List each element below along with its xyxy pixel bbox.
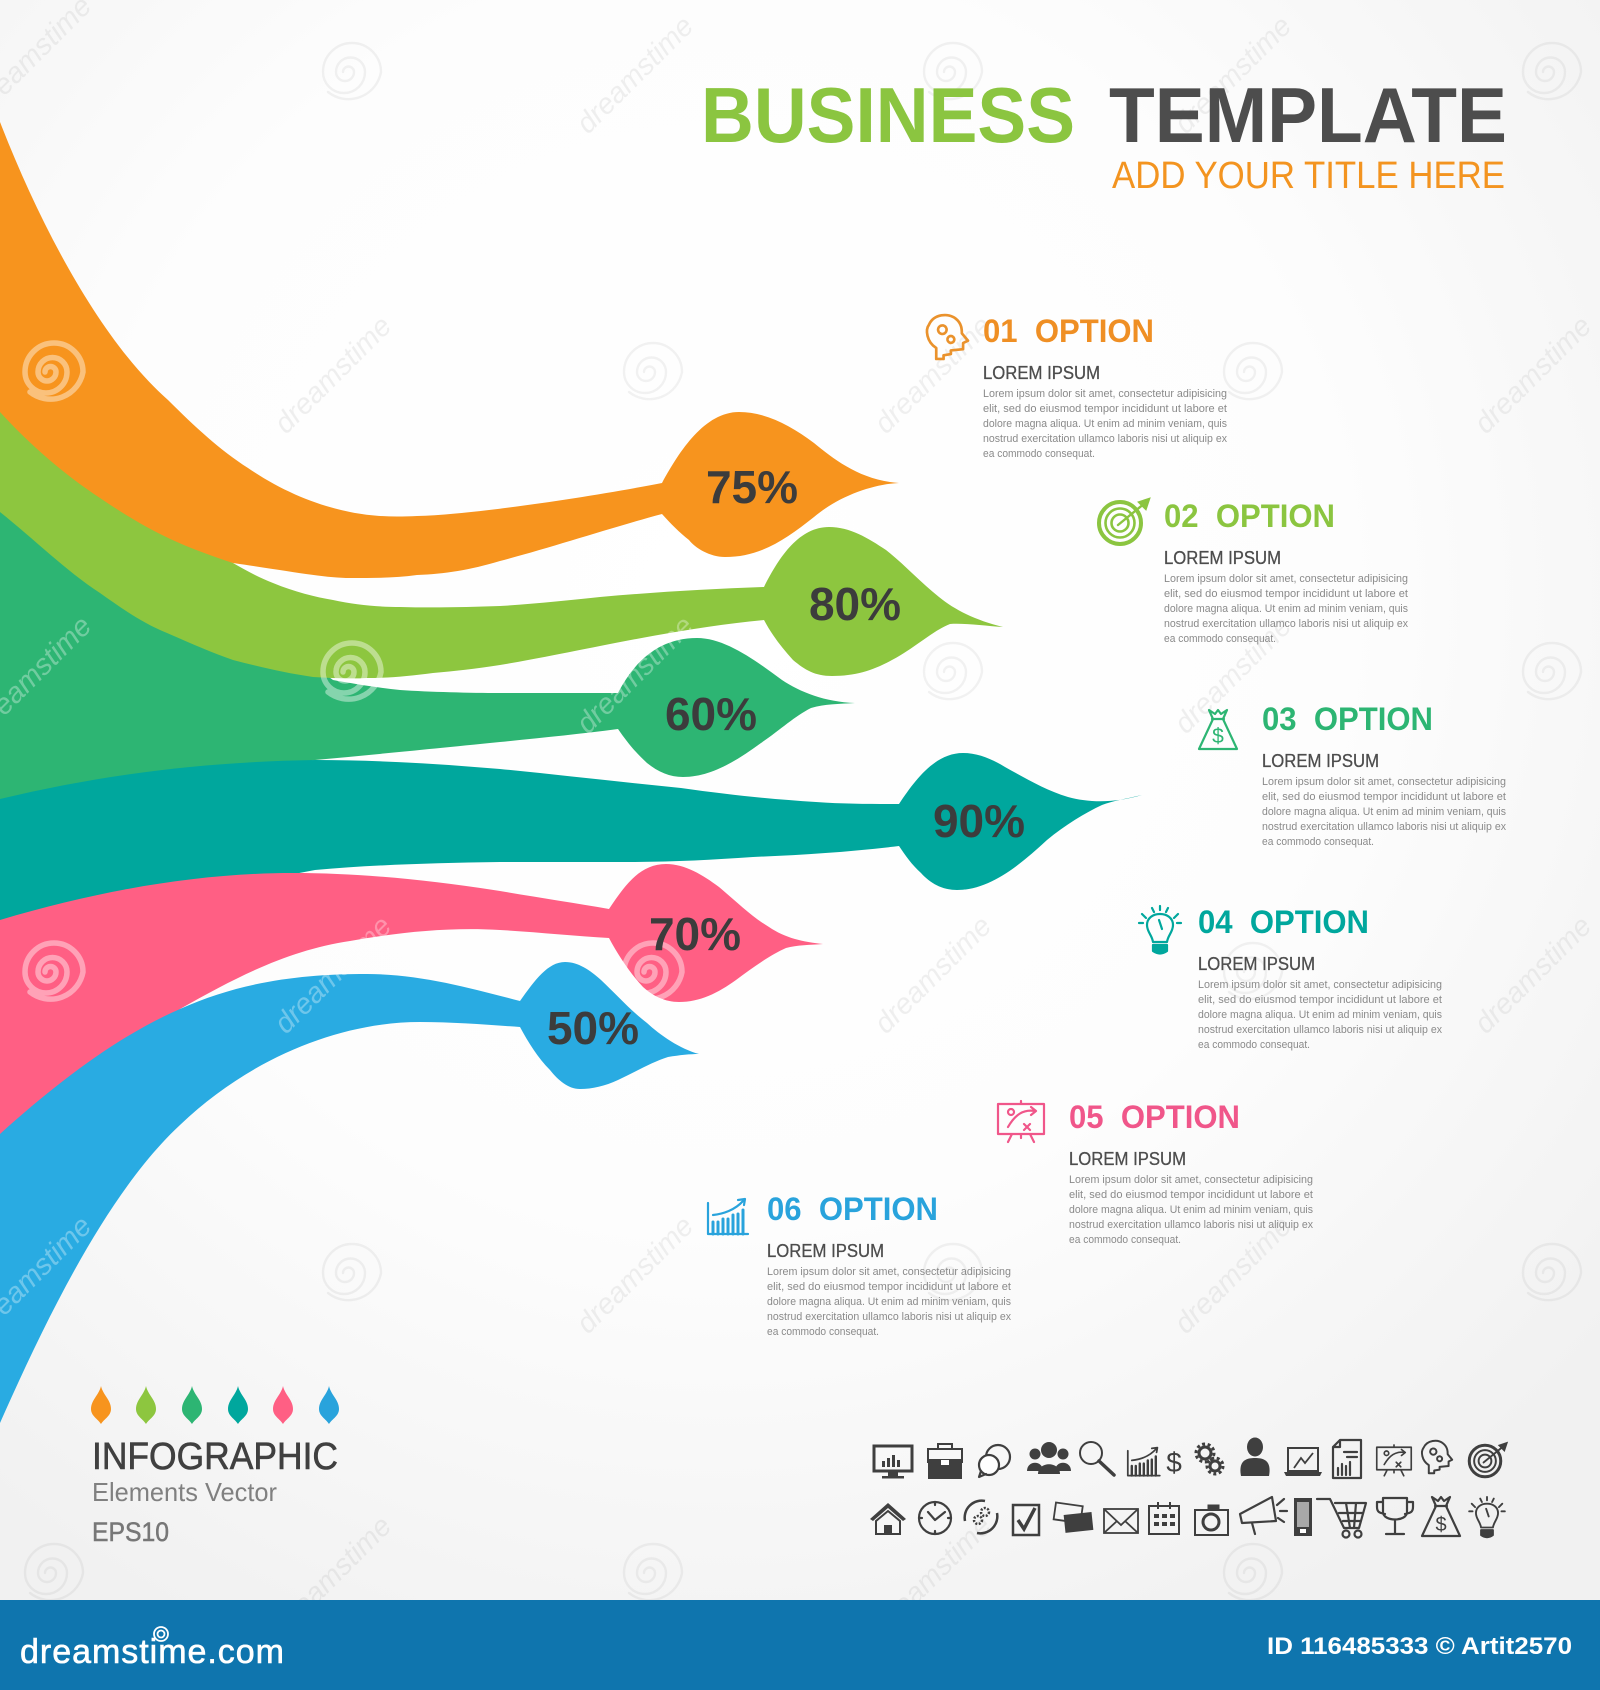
icon: document [1333,1440,1361,1478]
body text: dolore magna aliqua. Ut enim ad minim veniam, quis [1262,806,1506,818]
legend: colour drops [91,1386,339,1424]
icon: head with gears [927,315,968,359]
icon: credit cards [1054,1502,1093,1533]
label 50%: 50% [547,1002,639,1054]
body text [1164,573,1409,645]
subheading: LOREM IPSUM [1262,751,1379,771]
icon: trophy [1377,1498,1413,1534]
watermark text on white: dreamstime [1168,610,1298,740]
caption title: INFOGRAPHIC [92,1436,338,1478]
icon: shopping cart [1317,1499,1366,1538]
icon: briefcase [928,1444,962,1479]
icon: money bag [1199,710,1237,749]
subheading: LOREM IPSUM [983,363,1100,383]
footer id and author: ID 116485333 © Artit2570 [1267,1633,1572,1660]
heading 05: 05 OPTION [1069,1099,1240,1135]
body text [983,388,1228,460]
subheading: LOREM IPSUM [1198,954,1315,974]
body text: ea commodo consequat. [983,448,1095,460]
chart: branching percentage streams [0,122,1142,1423]
body text: dolore magna aliqua. Ut enim ad minim veniam, quis [983,418,1227,430]
watermark text on white: dreamstime [868,310,998,440]
title [701,71,1507,197]
body text: elit, sed do eiusmod tempor incididunt ut labore et [767,1281,1011,1293]
body text: dolore magna aliqua. Ut enim ad minim veniam, quis [1069,1204,1313,1216]
body text: dolore magna aliqua. Ut enim ad minim veniam, quis [1198,1009,1442,1021]
icon set row 2 [870,1497,1505,1538]
stream: 60% green [0,500,855,805]
watermark text on white: dreamstime [1468,910,1598,1040]
body text: ea commodo consequat. [1198,1039,1310,1051]
icon: bar chart [708,1199,748,1234]
subheading: LOREM IPSUM [767,1241,884,1261]
icon: cycle gears [965,1501,997,1533]
panel: option 05 [998,1099,1314,1246]
watermark text on white: dreamstime [1468,310,1598,440]
body text: elit, sed do eiusmod tempor incididunt ut labore et [983,403,1227,415]
body text: Lorem ipsum dolor sit amet, consectetur adipisicing [1198,979,1442,991]
panel: option 03 [1199,701,1507,848]
body text: nostrud exercitation ullamco laboris nisi ut aliquip ex [1198,1024,1443,1036]
label 60%: 60% [665,688,757,740]
label 70%: 70% [649,908,741,960]
watermark text on white: dreamstime [868,1510,998,1640]
icon: envelope [1104,1509,1138,1533]
watermark text on white: dreamstime [1168,1210,1298,1340]
watermark text on white: dreamstime [268,310,398,440]
icon: home [870,1503,906,1534]
body text: elit, sed do eiusmod tempor incididunt ut labore et [1262,791,1506,803]
label 75%: 75% [706,461,798,513]
body text: nostrud exercitation ullamco laboris nisi ut aliquip ex [983,433,1228,445]
body text [1069,1174,1314,1246]
icon: megaphone [1240,1497,1287,1534]
body text: ea commodo consequat. [1164,633,1276,645]
icon: target [1469,1442,1508,1477]
body text: elit, sed do eiusmod tempor incididunt ut labore et [1164,588,1408,600]
body text: dolore magna aliqua. Ut enim ad minim veniam, quis [767,1296,1011,1308]
heading 04: 04 OPTION [1198,904,1369,940]
panel: option 02 [1099,498,1409,645]
caption subtitle: Elements Vector [92,1477,277,1507]
body text: nostrud exercitation ullamco laboris nisi ut aliquip ex [1262,821,1507,833]
icon: money bag: $ [1212,725,1224,748]
heading 03: 03 OPTION [1262,701,1433,737]
icon: clock [919,1502,951,1534]
icon: dollar: $ [1166,1447,1182,1478]
icon: calendar [1149,1502,1179,1534]
icon: checkbox [1013,1505,1039,1535]
heading 01: 01 OPTION [983,313,1154,349]
stream: 75% orange [0,122,899,578]
title word: business: BUSINESS [701,71,1075,159]
body text: Lorem ipsum dolor sit amet, consectetur adipisicing [1069,1174,1313,1186]
icon: chat bubbles [979,1445,1010,1477]
watermark text on white: dreamstime [570,10,700,140]
footer site name: dreamstime.com [20,1633,284,1671]
watermark text over streams: dreamstime [268,910,398,1040]
caption version: EPS10 [92,1517,169,1547]
body text: nostrud exercitation ullamco laboris nisi ut aliquip ex [1164,618,1409,630]
icon: light bulb [1139,906,1181,954]
body text [767,1266,1012,1338]
panel: option 01 [927,313,1228,460]
body text: ea commodo consequat. [1262,836,1374,848]
heading 02: 02 OPTION [1164,498,1335,534]
footer bar [0,1600,1600,1690]
label 90%: 90% [933,795,1025,847]
percentage labels [547,461,1025,1054]
icon: growth chart [1128,1448,1160,1476]
body text: ea commodo consequat. [767,1326,879,1338]
body text: Lorem ipsum dolor sit amet, consectetur adipisicing [1164,573,1408,585]
watermark text on white: dreamstime [570,1210,700,1340]
panel: option 04 [1139,904,1443,1051]
label 80%: 80% [809,578,901,630]
body text: dolore magna aliqua. Ut enim ad minim veniam, quis [1164,603,1408,615]
body text: Lorem ipsum dolor sit amet, consectetur adipisicing [983,388,1227,400]
body text [1198,979,1443,1051]
watermark text on white: dreamstime [1168,10,1298,140]
title word: template: TEMPLATE [1109,71,1507,159]
icon: camera [1195,1505,1228,1535]
panel: option 06 [708,1191,1012,1338]
icon: magnifier [1080,1442,1114,1475]
infographic caption [92,1436,338,1547]
icon: team [1027,1442,1071,1474]
body text: elit, sed do eiusmod tempor incididunt ut labore et [1069,1189,1313,1201]
watermark text on white: dreamstime [268,1510,398,1640]
icon: monitor [874,1446,912,1478]
body text: nostrud exercitation ullamco laboris nisi ut aliquip ex [1069,1219,1314,1231]
body text: Lorem ipsum dolor sit amet, consectetur adipisicing [1262,776,1506,788]
icon: presentation board [998,1101,1044,1142]
watermark text over streams [0,610,700,1340]
icon: laptop [1284,1448,1322,1476]
icon: money bag [1422,1497,1460,1536]
stream: 80% lime [0,412,1003,678]
subtitle: ADD YOUR TITLE HERE [1112,155,1505,197]
body text: elit, sed do eiusmod tempor incididunt ut labore et [1198,994,1442,1006]
watermark text on white: dreamstime [868,910,998,1040]
icon: light bulb [1469,1497,1505,1537]
icon: target [1099,498,1150,544]
icon: money bag: $ [1435,1514,1447,1536]
body text: ea commodo consequat. [1069,1234,1181,1246]
icon: person [1240,1438,1270,1476]
icon: head [1422,1441,1452,1473]
stream: 70% pink [0,864,823,1160]
body text: Lorem ipsum dolor sit amet, consectetur adipisicing [767,1266,1011,1278]
icon: smartphone [1294,1498,1312,1536]
body text: nostrud exercitation ullamco laboris nisi ut aliquip ex [767,1311,1012,1323]
subheading: LOREM IPSUM [1164,548,1281,568]
watermark text over streams: dreamstime [570,610,700,740]
icon: footer logo spiral [154,1627,168,1641]
body text [1262,776,1507,848]
icon: strategy board [1377,1445,1411,1476]
stream: 90% teal [0,753,1142,930]
watermark spirals over streams [25,343,682,999]
icon set row 1 [874,1438,1508,1479]
icon: gears [1196,1444,1223,1474]
heading 06: 06 OPTION [767,1191,938,1227]
subheading: LOREM IPSUM [1069,1149,1186,1169]
stream: 50% blue [0,962,699,1423]
